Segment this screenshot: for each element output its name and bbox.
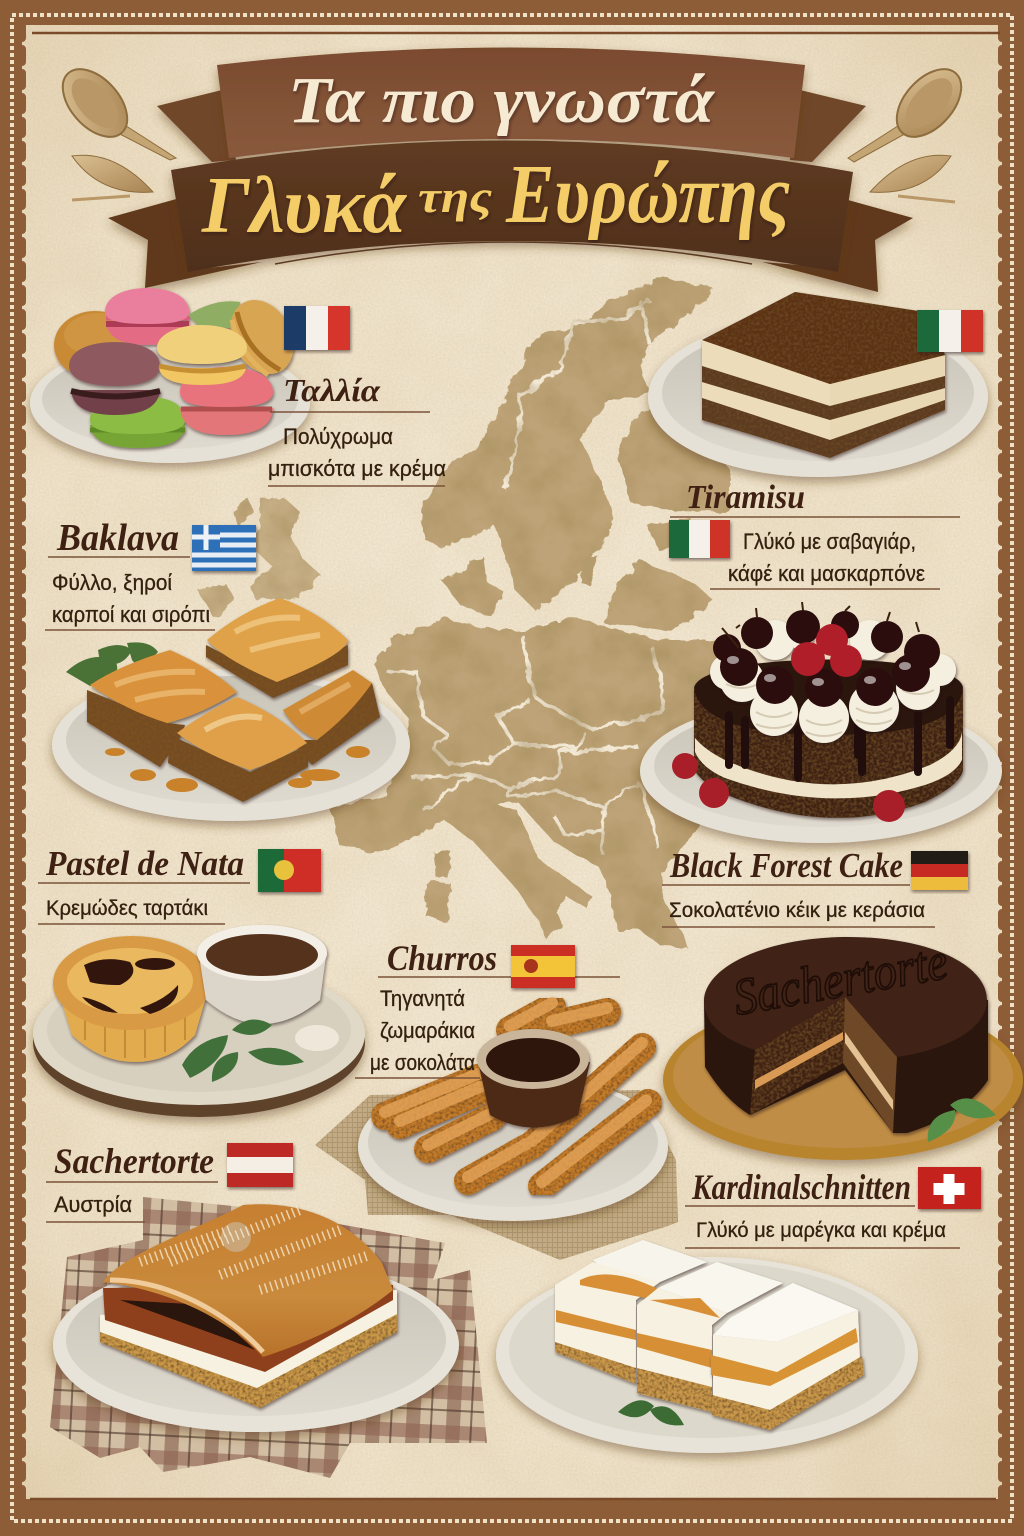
- map: Scandinavia: [420, 277, 713, 610]
- front piece: [168, 697, 308, 802]
- right piece: [283, 670, 380, 765]
- plate: [33, 963, 365, 1117]
- description: Γλύκό με μαρέγκα και κρέμα: [696, 1219, 946, 1242]
- description: Αυστρία: [54, 1192, 132, 1217]
- cake body: [704, 937, 988, 1133]
- left piece: [87, 650, 237, 767]
- description: Σοκολατένιο κέικ με κεράσια: [669, 899, 925, 922]
- description: μπισκότα με κρέμα: [268, 456, 446, 481]
- heading: Ταλλία: [283, 372, 381, 408]
- banner: upper ribbon: [217, 48, 805, 158]
- plate: [640, 699, 1002, 843]
- map: Italy: [443, 800, 593, 940]
- flag: Italy: [917, 310, 983, 352]
- flag: Greece: [192, 525, 256, 571]
- cake body: [694, 660, 963, 818]
- green back macaron: [188, 301, 240, 328]
- icon: mint leaves: [618, 1400, 684, 1425]
- panel: baklava: [45, 517, 410, 821]
- underline: [662, 884, 910, 886]
- plate: [53, 1258, 459, 1432]
- icon: mint leaves: [66, 642, 158, 686]
- description: [710, 529, 940, 589]
- panel: chocolate torte: [663, 933, 1023, 1248]
- map: Baltic island: [580, 556, 598, 585]
- icon: basil leaves: [182, 1020, 304, 1082]
- plate: [358, 1073, 668, 1221]
- map: country borders: [387, 636, 663, 855]
- map: Corsica: [433, 850, 450, 877]
- loose cherries: [672, 753, 905, 822]
- flag: Switzerland: [918, 1167, 981, 1209]
- description: [46, 1192, 145, 1222]
- icon: left wooden leaf: [72, 155, 153, 200]
- map: Denmark: [443, 556, 503, 618]
- banner tails: [108, 90, 913, 292]
- description: Κρεμώδες ταρτάκι: [46, 897, 208, 920]
- caramel macaron: [54, 311, 136, 379]
- heading: Baklava: [56, 517, 179, 559]
- plate: [496, 1257, 918, 1453]
- sugar pile: [295, 1025, 339, 1051]
- flag: Italy small: [669, 520, 730, 558]
- map: Finland: [617, 400, 730, 512]
- description: ζωμαράκια: [380, 1018, 475, 1043]
- mauve macaron: [69, 342, 160, 415]
- heading line one: Τα πιο γνωστά: [288, 64, 716, 137]
- plate: [663, 1000, 1023, 1160]
- flag: Germany: [911, 851, 968, 890]
- heading: Pastel de Nata: [45, 844, 244, 883]
- flag: France: [284, 306, 350, 350]
- underline: [270, 411, 430, 413]
- panel: tiramisu: [648, 292, 988, 589]
- syrup drips: [105, 746, 370, 792]
- heading: Kardinalschnitten: [691, 1167, 911, 1207]
- yellow macaron: [157, 325, 247, 385]
- flag: Austria: [227, 1143, 293, 1187]
- underline: [685, 1205, 915, 1207]
- chocolate cup: [477, 1029, 590, 1128]
- plaid napkin: [50, 1197, 487, 1478]
- description: Τηγανητά: [380, 986, 465, 1011]
- description: Πολύχρωμα: [283, 424, 393, 449]
- chocolate dip bowl: [197, 925, 327, 1024]
- banner: lower ribbon: [171, 140, 853, 272]
- map: Britain and Ireland: [198, 496, 322, 618]
- red macaron: [180, 367, 273, 435]
- cream dollops and cherries: [710, 602, 956, 743]
- map: Sardinia: [425, 882, 450, 922]
- panel: sachertorte pastry: [46, 1141, 487, 1478]
- tiramisu slice: [702, 292, 945, 458]
- icon: right wooden spoon: [848, 57, 974, 162]
- underline: [38, 882, 250, 884]
- heading: Tiramisu: [686, 479, 805, 516]
- pastry layers: [100, 1204, 397, 1408]
- description: με σοκολάτα: [370, 1050, 475, 1075]
- slice three: [711, 1283, 864, 1430]
- underline: [46, 1181, 218, 1183]
- baklava pieces: [87, 598, 380, 802]
- macaron stack: [54, 288, 306, 448]
- heading: Black Forest Cake: [669, 846, 903, 885]
- title banner: [108, 48, 913, 292]
- map: continental Europe: [330, 618, 735, 950]
- icon: mint leaf: [928, 1098, 996, 1142]
- icon: left wooden spoon: [50, 57, 176, 160]
- slice two: [637, 1262, 783, 1412]
- plate: [648, 317, 988, 477]
- description: [355, 986, 480, 1078]
- heading: Churros: [387, 938, 497, 978]
- underline: [378, 976, 620, 978]
- description: Φύλλο, ξηροί: [52, 570, 172, 595]
- panel: pastel de nata: [33, 844, 365, 1117]
- Sachertorte lettering: Sachertorte: [729, 933, 952, 1027]
- pastel tart: [53, 936, 211, 1062]
- panel: macarons: [30, 288, 446, 486]
- panel: churros: [315, 938, 678, 1260]
- underline: [48, 556, 190, 558]
- decorative curve under banner: [275, 242, 752, 264]
- flag: Portugal: [258, 849, 321, 892]
- underline: [670, 516, 960, 518]
- heading line two: της: [418, 171, 493, 222]
- heading line two: [201, 148, 790, 250]
- map: Baltics: [603, 560, 713, 632]
- pink macaron: [105, 288, 189, 345]
- map of Europe: [198, 277, 735, 950]
- description: [45, 570, 215, 630]
- slice one: [555, 1240, 707, 1384]
- plate: [52, 669, 410, 821]
- churros sticks: [385, 1003, 648, 1186]
- description: [268, 424, 446, 486]
- panel: kardinalschnitten dish: [496, 1240, 918, 1453]
- heading: Sachertorte: [54, 1141, 214, 1181]
- back right piece: [206, 598, 348, 698]
- plate: [30, 343, 310, 463]
- heading line two: Ευρώπης: [505, 148, 790, 241]
- description: Γλύκό με σαβαγιάρ,: [743, 529, 916, 554]
- icon: right wooden leaf: [870, 155, 955, 202]
- panel: black forest cake: [640, 602, 1002, 927]
- map: Scandinavia borders: [505, 300, 650, 490]
- heading line two: Γλυκά: [201, 162, 408, 250]
- description: καρποί και σιρόπι: [52, 602, 210, 627]
- description: κάφέ και μασκαρπόνε: [728, 561, 925, 586]
- burlap mat: [315, 1090, 678, 1260]
- flag: Spain: [511, 945, 575, 988]
- tan macaron: [218, 289, 306, 385]
- green macaron: [90, 396, 185, 448]
